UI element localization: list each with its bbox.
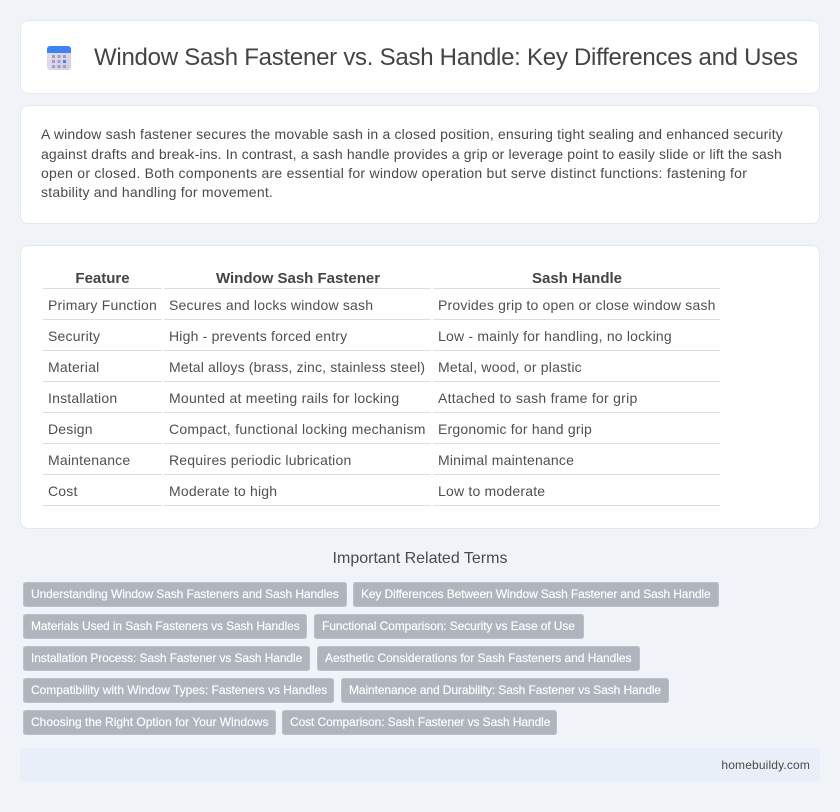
- intro paragraph: [41, 126, 783, 200]
- footer site name: homebuildy.com: [721, 758, 810, 772]
- table rows: Cost: [48, 483, 78, 499]
- footer bar: [20, 748, 820, 782]
- table rows: Material: [48, 359, 99, 375]
- related term tags: Materials Used in Sash Fasteners vs Sash Handles: [31, 619, 300, 633]
- related term tags: Maintenance and Durability: Sash Fastener vs Sash Handle: [349, 683, 661, 697]
- related term tags: Aesthetic Considerations for Sash Fasteners and Handles: [325, 651, 632, 665]
- table rows: Mounted at meeting rails for locking: [169, 390, 399, 406]
- related terms heading: Important Related Terms: [333, 550, 507, 567]
- table rows: Maintenance: [48, 452, 130, 468]
- table rows: Ergonomic for hand grip: [438, 421, 592, 437]
- related term tags: Functional Comparison: Security vs Ease of Use: [322, 619, 575, 633]
- table rows: Metal alloys (brass, zinc, stainless steel): [169, 359, 425, 375]
- comparison table card: [20, 245, 820, 529]
- intro paragraph: A window sash fastener secures the movable sash in a closed position, ensuring tight sealing and enhanced security: [41, 126, 783, 142]
- intro paragraph: stability and handling for movement.: [41, 184, 273, 200]
- table rows: Primary Function: [48, 297, 157, 313]
- table rows: Requires periodic lubrication: [169, 452, 351, 468]
- related term tags: Cost Comparison: Sash Fastener vs Sash Handle: [290, 715, 550, 729]
- column headers: [75, 270, 622, 287]
- table rows: Provides grip to open or close window sash: [438, 297, 716, 313]
- related term tags: Key Differences Between Window Sash Fastener and Sash Handle: [361, 587, 711, 601]
- table rows: Low to moderate: [438, 483, 545, 499]
- intro card: [20, 105, 820, 224]
- table rows: Compact, functional locking mechanism: [169, 421, 426, 437]
- comparison table: Sash Handle: [532, 270, 622, 287]
- comparison table: Feature: [75, 270, 130, 287]
- comparison table: [43, 270, 720, 506]
- related term tags: Choosing the Right Option for Your Windows: [31, 715, 268, 729]
- header card: [20, 20, 820, 94]
- related term tags: Understanding Window Sash Fasteners and Sash Handles: [31, 587, 339, 601]
- table rows: Moderate to high: [169, 483, 277, 499]
- intro paragraph: open or closed. Both components are essential for window operation but serve distinct functions: fastening for: [41, 165, 747, 181]
- table rows: Security: [48, 328, 100, 344]
- related term tags: Installation Process: Sash Fastener vs Sash Handle: [31, 651, 302, 665]
- table rows: Low - mainly for handling, no locking: [438, 328, 672, 344]
- table rows: Attached to sash frame for grip: [438, 390, 638, 406]
- comparison table: Window Sash Fastener: [216, 270, 380, 287]
- table rows: High - prevents forced entry: [169, 328, 347, 344]
- table rows: [43, 288, 720, 506]
- table rows: Installation: [48, 390, 117, 406]
- related term tags: [23, 582, 719, 735]
- table rows: Minimal maintenance: [438, 452, 574, 468]
- title: Window Sash Fastener vs. Sash Handle: Key Differences and Uses: [94, 44, 798, 71]
- related term tags: Compatibility with Window Types: Fasteners vs Handles: [31, 683, 327, 697]
- intro paragraph: against drafts and break-ins. In contrast, a sash handle provides a grip or leverage point to easily slide or lift the sash: [41, 146, 782, 162]
- table rows: Design: [48, 421, 93, 437]
- icon: calendar: [47, 46, 71, 70]
- table rows: Secures and locks window sash: [169, 297, 373, 313]
- table rows: Metal, wood, or plastic: [438, 359, 582, 375]
